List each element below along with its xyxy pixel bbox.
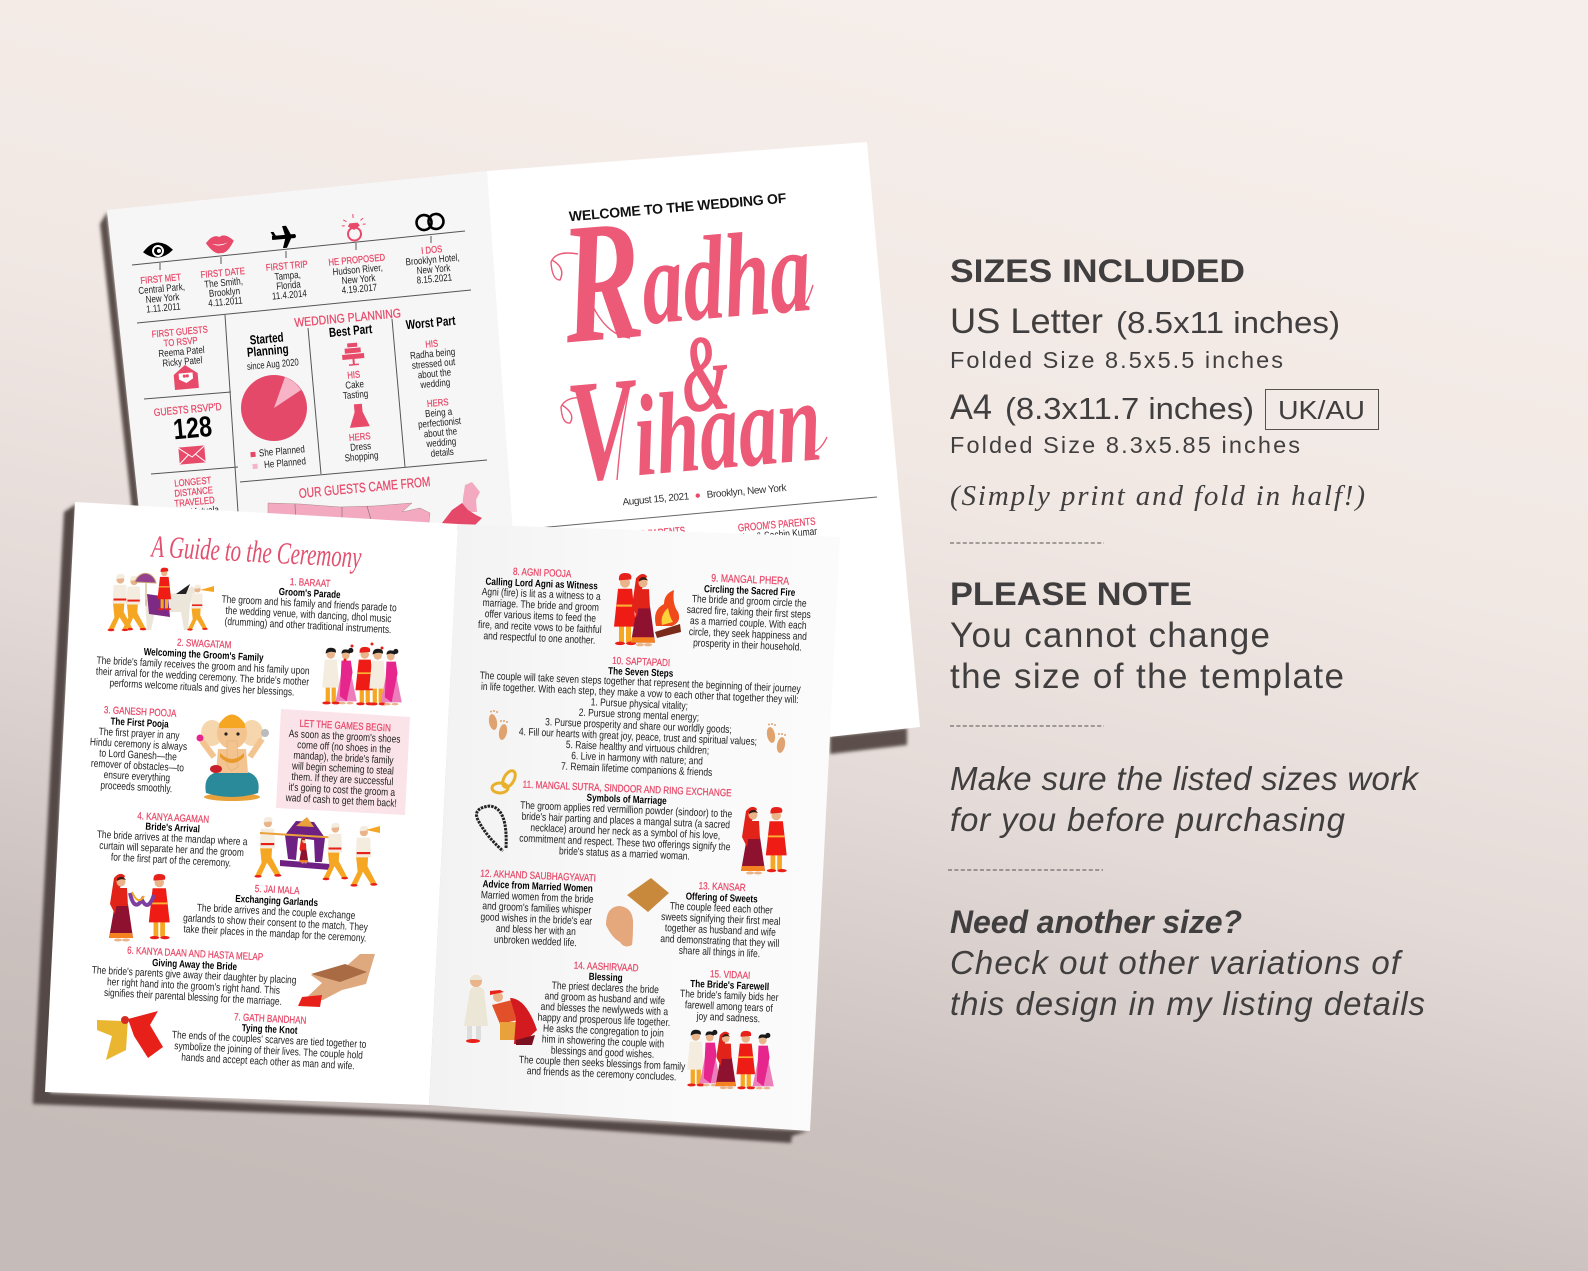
horse	[145, 584, 196, 630]
started planning: Started	[249, 331, 284, 348]
milestone: first date: Brooklyn	[208, 285, 240, 299]
step 2 swagatam: their arrival for the wedding ceremony. The bride's mother	[96, 666, 310, 689]
milestone: i dos: Brooklyn Hotel,	[405, 252, 460, 268]
his worst part: HIS	[425, 338, 439, 350]
step 11 mangal sutra: Symbols of Marriage	[586, 792, 667, 806]
icon: eye	[142, 241, 174, 259]
step 13 kansar: share all things in life.	[678, 945, 760, 960]
step 3 ganesh pooja: remover of obstacles—to	[91, 758, 184, 775]
icon: footprints right	[766, 723, 786, 754]
step 8 agni pooja: Agni (fire) is lit as a witness to a	[482, 586, 601, 603]
step 5 jai mala: 5. JAI MALA	[255, 883, 301, 896]
step 4 kanya agaman: Bride's Arrival	[145, 821, 200, 835]
another size note: Need another size?	[950, 904, 1242, 940]
step 2 swagatam: 2. SWAGATAM	[177, 637, 232, 651]
callout: let the games begin: will begin scheming to steal	[291, 760, 394, 778]
step 5 jai mala: Exchanging Garlands	[235, 893, 318, 908]
step 14 aashirvaad: and groom as husband and wife	[544, 990, 665, 1008]
step 1 baraat: 1. BARAAT	[290, 576, 331, 589]
his worst part: stressed out	[411, 356, 456, 371]
a4 folded size: Folded Size 8.3x5.85 inches	[950, 432, 1300, 458]
step 3 ganesh pooja: 3. GANESH POOJA	[104, 704, 177, 719]
icon: wedding rings	[416, 213, 444, 231]
step 12 akhand saubhagyavati: Married women from the bride	[481, 889, 594, 906]
step 8 agni pooja: marriage. The bride and groom	[482, 597, 599, 614]
step 14 aashirvaad: happy and prosperous life together.	[537, 1012, 670, 1029]
name: Radha: R	[554, 184, 649, 380]
his worst part: Radha being	[410, 346, 456, 361]
step 14 aashirvaad: and blesses the newlyweds with a	[540, 1001, 669, 1019]
step 9 mangal phera: Circling the Sacred Fire	[704, 583, 796, 598]
step 1 baraat: The groom and his family and friends parade to	[221, 594, 397, 615]
step 9 mangal phera: 9. MANGAL PHERA	[711, 573, 790, 588]
shadow: front sheet	[33, 504, 808, 1143]
milestone: first trip: 11.4.2014	[271, 288, 307, 302]
step 8 agni pooja: Calling Lord Agni as Witness	[485, 576, 598, 592]
a4 size: A4	[950, 388, 992, 427]
icon: diamond ring	[341, 213, 367, 241]
illustration: priest blessing couple	[464, 975, 537, 1045]
step 8 agni pooja: 8. AGNI POOJA	[513, 566, 572, 579]
step 15 vidaai: The Bride's Farewell	[690, 978, 769, 992]
milestone: i dos: I DOS	[421, 243, 443, 256]
step 11 mangal sutra: necklace) around her neck as a symbol of his love,	[530, 822, 720, 842]
step 5 jai mala: garlands to show their consent to the match. They	[183, 912, 368, 934]
milestone: first trip: Florida	[276, 279, 302, 292]
step 14 aashirvaad: 14. AASHIRVAAD	[573, 960, 639, 974]
step 6 kanya daan: her right hand into the groom's right hand. This	[107, 976, 280, 997]
hers worst part	[416, 395, 465, 460]
callout: let the games begin: wad of cash to get them back!	[285, 792, 397, 810]
step 11 mangal sutra: commitment and respect. These two offerings signify the	[519, 833, 731, 854]
step 14 aashirvaad: blessings and good wishes.	[551, 1045, 654, 1061]
step 6 kanya daan: Giving Away the Bride	[152, 957, 237, 972]
longest distance traveled: DISTANCE	[174, 484, 213, 499]
wedding planning heading: WEDDING PLANNING	[294, 306, 402, 330]
step 10 saptapadi: 10. SAPTAPADI	[612, 655, 670, 668]
step 5 jai mala: The bride arrives and the couple exchange	[196, 902, 356, 922]
name swashes	[551, 253, 827, 480]
callout: let the games begin: it's going to cost the groom a	[288, 782, 396, 799]
step 14 aashirvaad: He asks the congregation to join	[543, 1023, 664, 1040]
illustration: sindoor ceremony	[741, 807, 787, 874]
uk/au badge: UK/AU	[1278, 395, 1365, 425]
step 12 akhand saubhagyavati	[477, 868, 596, 950]
milestone: he proposed: New York	[341, 272, 376, 286]
step 13 kansar: and demonstrating that they will	[660, 933, 780, 950]
step 10 saptapadi: 5. Raise healthy and virtuous children;	[566, 739, 709, 757]
his worst part: wedding	[419, 377, 451, 390]
divider dashes	[948, 543, 1104, 870]
his best part: Tasting	[342, 388, 369, 401]
step 15 vidaai: joy and sadness.	[695, 1011, 760, 1026]
step 7 gath bandhan: Tying the Knot	[242, 1022, 298, 1036]
shadow: back sheet	[100, 212, 907, 754]
icon: footprints left	[488, 710, 508, 741]
step 15 vidaai: 15. VIDAAI	[710, 968, 750, 981]
worst part: Worst Part	[405, 315, 456, 333]
longest distance traveled: LONGEST	[174, 474, 212, 489]
step 15 vidaai	[679, 967, 780, 1026]
step 2 swagatam	[95, 633, 312, 700]
illustration: baraat procession	[108, 568, 214, 631]
guide title: A Guide to the Ceremony	[149, 528, 362, 574]
parents credits	[614, 515, 818, 545]
icon: gold rings	[492, 769, 518, 793]
step 3 ganesh pooja: proceeds smoothly.	[100, 780, 173, 796]
milestone: first met: FIRST MET	[140, 271, 182, 286]
milestone: first trip	[265, 258, 311, 302]
pie legend: He Planned	[264, 456, 306, 471]
step 13 kansar	[659, 879, 782, 961]
step 7 gath bandhan: The ends of the couples' scarves are tied together to	[172, 1029, 367, 1051]
step 10 saptapadi: 2. Pursue strong mental energy;	[578, 707, 699, 724]
illustration: Ganesh	[196, 714, 269, 801]
icon: dress	[348, 403, 370, 428]
milestone: first trip: FIRST TRIP	[265, 258, 308, 273]
step 11 mangal sutra: The groom applies red vermillion powder (sindoor) to the	[520, 800, 732, 821]
illustration: exchanging garlands	[109, 874, 170, 942]
parents credits: Lisa & Sachin Kumar	[738, 526, 818, 545]
longest distance traveled: TRAVELED	[174, 494, 215, 509]
illustration: tied scarves	[97, 1011, 163, 1060]
hers worst part: perfectionist	[418, 415, 462, 430]
guests rsvp'd count	[153, 401, 225, 448]
step 10 saptapadi: The couple will take seven steps together that represent the beginning of their journey	[480, 670, 801, 696]
purchase note	[950, 760, 1420, 838]
his worst part: about the	[417, 367, 452, 381]
another size note: this design in my listing details	[950, 985, 1425, 1022]
step 12 akhand saubhagyavati: unbroken wedded life.	[494, 934, 577, 949]
step 10 saptapadi: 3. Pursue prosperity and share our worldly goods;	[545, 716, 732, 736]
hers best part: HERS	[348, 430, 371, 443]
best part: Best Part	[329, 323, 373, 340]
cover divider	[538, 497, 877, 528]
front right page	[429, 524, 840, 1131]
milestone: first date	[200, 265, 248, 309]
step 6 kanya daan	[90, 943, 298, 1009]
hers worst part: wedding	[425, 436, 457, 449]
step 7 gath bandhan: symbolize the joining of their lives. The couple hold	[174, 1040, 363, 1062]
heading: please note: PLEASE NOTE	[950, 576, 1192, 612]
milestone: first met: 1.11.2011	[146, 301, 181, 315]
icon: cake	[341, 342, 365, 366]
date and location	[622, 483, 788, 508]
step 5 jai mala: take their places in the mandap for the ceremony.	[183, 923, 367, 945]
step 6 kanya daan: signifies their parental blessing for the marriage.	[104, 987, 282, 1008]
step 4 kanya agaman: The bride arrives at the mandap where a	[97, 829, 248, 849]
step 12 akhand saubhagyavati: 12. AKHAND SAUBHAGYAVATI	[480, 868, 596, 884]
step 15 vidaai: The bride's family bids her	[680, 988, 779, 1004]
step 7 gath bandhan: hands and accept each other as man and wife.	[181, 1052, 355, 1073]
us letter size: US Letter	[950, 302, 1103, 341]
his worst part	[409, 336, 458, 391]
panel: sizes and notes	[948, 253, 1425, 1022]
milestone: first trip: Tampa,	[274, 269, 301, 282]
name: Vihaan: Vihaan	[561, 332, 826, 513]
date and location: August 15, 2021	[622, 491, 690, 508]
icon: envelope	[178, 445, 206, 465]
step 1 baraat: Groom's Parade	[278, 586, 341, 600]
milestone: i dos: New York	[416, 262, 451, 276]
his best part	[341, 368, 369, 401]
step 10 saptapadi	[476, 649, 802, 783]
back sheet right page: cover	[487, 142, 920, 770]
step 1 baraat	[220, 573, 398, 637]
step 14 aashirvaad	[518, 958, 690, 1084]
step 15 vidaai: farewell among tears of	[685, 999, 773, 1015]
hers worst part: HERS	[426, 396, 449, 409]
his best part: HIS	[347, 369, 361, 381]
started planning	[244, 330, 299, 372]
step 13 kansar: together as husband and wife	[665, 922, 776, 939]
step 8 agni pooja: and respectful to one another.	[483, 630, 596, 647]
first guests to rsvp: Reema Patel	[158, 344, 205, 359]
icon: airplane	[270, 225, 297, 249]
step 14 aashirvaad: him in showering the couple with	[542, 1034, 664, 1051]
step 3 ganesh pooja: The first prayer in any	[98, 726, 180, 742]
first guests to rsvp	[151, 324, 211, 370]
step 14 aashirvaad: Blessing	[589, 971, 623, 983]
step 3 ganesh pooja	[87, 704, 189, 796]
milestone: first met	[137, 271, 187, 315]
icon: ear	[606, 906, 633, 946]
uk/au badge	[1266, 390, 1378, 430]
step 11 mangal sutra	[518, 779, 733, 865]
cover names	[554, 170, 826, 513]
step 4 kanya agaman: curtain will separate her and the groom	[99, 840, 244, 859]
milestone: first met: Central Park,	[138, 281, 185, 296]
step 3 ganesh pooja: to Lord Ganesh—the	[99, 748, 177, 764]
first guests to rsvp: Ricky Patel	[162, 354, 203, 369]
step 8 agni pooja: offer various items to feed the	[484, 608, 596, 625]
longest distance traveled: Kate Matuala	[171, 504, 220, 519]
panel: back sheet with infographic and cover	[107, 142, 920, 770]
milestone: he proposed: Hudson River,	[332, 262, 383, 277]
print note: (Simply print and fold in half!)	[950, 480, 1365, 512]
hers best part: Dress	[350, 440, 372, 453]
icon: open envelope with heart	[173, 364, 199, 390]
step 10 saptapadi: in life together. With each step, they make a vow to each other that together they will:	[481, 681, 799, 706]
started planning: Planning	[246, 343, 289, 360]
hers worst part: about the	[423, 426, 458, 440]
step 4 kanya agaman: 4. KANYA AGAMAN	[137, 810, 209, 825]
template size note: the size of the template	[950, 657, 1344, 696]
us letter size: (8.5x11 inches)	[1116, 305, 1340, 340]
us letter size	[950, 302, 1340, 341]
icon: lips	[205, 235, 235, 254]
guests rsvp'd count: 128	[172, 409, 213, 446]
pie legend	[250, 444, 306, 472]
step 12 akhand saubhagyavati: good wishes in the bride's ear	[480, 911, 593, 928]
step 4 kanya agaman: for the first part of the ceremony.	[111, 852, 231, 870]
milestone: first date: FIRST DATE	[200, 265, 245, 280]
step 13 kansar: sweets signifying their first meal	[661, 911, 781, 928]
his best part: Cake	[345, 378, 364, 391]
step 12 akhand saubhagyavati: and bless her with an	[496, 923, 576, 938]
parents credits: GROOM'S PARENTS	[737, 515, 816, 534]
milestone: first met: New York	[145, 291, 180, 305]
a4 size: (8.3x11.7 inches)	[1005, 391, 1254, 426]
started planning: since Aug 2020	[246, 356, 299, 372]
step 13 kansar: 13. KANSAR	[698, 880, 746, 893]
first guests to rsvp: TO RSVP	[163, 335, 198, 349]
another size note: Check out other variations of	[950, 944, 1404, 981]
template size note: You cannot change	[950, 616, 1270, 655]
milestone: first date: The Smith,	[204, 275, 243, 290]
illustration: joined hands	[298, 954, 375, 1007]
step 9 mangal phera: as a married couple. With each	[690, 615, 807, 632]
step 3 ganesh pooja: The First Pooja	[110, 716, 170, 730]
step 13 kansar: Offering of Sweets	[685, 891, 758, 905]
purchase note: Make sure the listed sizes work	[950, 760, 1420, 797]
illustration: couple at sacred fire	[614, 573, 681, 646]
dividers	[132, 231, 487, 512]
ampersand: &	[676, 312, 734, 437]
step 12 akhand saubhagyavati: and groom's families whisper	[482, 900, 592, 917]
step 2 swagatam: Welcoming the Groom's Family	[143, 646, 265, 663]
purchase note: for you before purchasing	[950, 801, 1346, 838]
step 9 mangal phera: circle, they seek happiness and	[689, 626, 807, 643]
step 3 ganesh pooja: Hindu ceremony is always	[90, 736, 188, 753]
step 8 agni pooja: fire, and recite vows to be faithful	[478, 619, 602, 636]
step 9 mangal phera: sacred fire, taking their first steps	[686, 604, 811, 621]
step 1 baraat: the wedding venue, with dancing, dhol music	[225, 605, 392, 625]
step 14 aashirvaad: The priest declares the bride	[551, 980, 659, 997]
milestone: i dos	[404, 242, 462, 287]
step 2 swagatam: performs welcome rituals and gives her blessings.	[109, 677, 295, 699]
pie legend: She Planned	[259, 444, 305, 459]
heading: sizes included: SIZES INCLUDED	[950, 253, 1245, 289]
guests rsvp'd count: GUESTS RSVP'D	[153, 401, 222, 419]
icon: sweet	[627, 878, 669, 912]
date and location: Brooklyn, New York	[706, 483, 788, 501]
guests came from heading: OUR GUESTS CAME FROM	[298, 474, 431, 501]
step 10 saptapadi: 7. Remain lifetime companions & friends	[561, 761, 713, 779]
parents credits: BRIDE'S PARENTS	[614, 524, 686, 542]
step 5 jai mala	[182, 879, 370, 945]
step 10 saptapadi: 4. Fill our hearts with great joy, peace, trust and spiritual values;	[519, 726, 757, 748]
step 6 kanya daan: 6. KANYA DAAN AND HASTA MELAP	[127, 945, 263, 963]
pie chart: she planned vs he planned	[241, 375, 307, 441]
callout: let the games begin: mandap), the bride's family	[293, 750, 394, 767]
callout: let the games begin: come off (no shoes in the	[297, 739, 391, 756]
step 1 baraat: (drumming) and other traditional instruments.	[224, 616, 392, 636]
step 2 swagatam: The bride's family receives the groom and his family upon	[96, 655, 310, 678]
step 9 mangal phera: prosperity in their household.	[693, 637, 802, 654]
step 11 mangal sutra: bride's status as a married woman.	[559, 845, 690, 863]
back sheet left page	[107, 171, 530, 540]
front left page	[45, 502, 458, 1105]
callout: let the games begin: LET THE GAMES BEGIN	[299, 718, 391, 734]
step 9 mangal phera	[685, 572, 813, 654]
step 14 aashirvaad: and friends as the ceremony concludes.	[527, 1065, 677, 1084]
step 10 saptapadi: 1. Pursue physical vitality;	[590, 696, 688, 713]
callout: let the games begin: them. If they are successful	[291, 771, 394, 789]
another size note	[950, 904, 1425, 1022]
us folded size: Folded Size 8.5x5.5 inches	[950, 347, 1283, 373]
milestone: he proposed: HE PROPOSED	[328, 252, 385, 268]
step 7 gath bandhan: 7. GATH BANDHAN	[234, 1011, 307, 1026]
step 11 mangal sutra: bride's hair parting and places a mangal sutra (a sacred	[521, 811, 730, 832]
template size note	[950, 616, 1344, 696]
callout: let the games begin: As soon as the groom's shoes	[288, 728, 401, 746]
illustration: welcoming family	[322, 642, 402, 705]
milestone: he proposed: 4.19.2017	[341, 282, 378, 296]
a4 size	[950, 388, 1254, 427]
name: Radha: adha	[636, 203, 816, 350]
step 11 mangal sutra: 11. MANGAL SUTRA, SINDOOR AND RING EXCHANGE	[522, 779, 732, 799]
icon: mangal sutra necklace	[476, 806, 506, 851]
step 10 saptapadi: The Seven Steps	[608, 665, 673, 679]
step 12 akhand saubhagyavati: Advice from Married Women	[482, 878, 593, 894]
map of guest origins	[268, 482, 482, 530]
milestone: he proposed	[328, 252, 388, 297]
callout: let the games begin	[276, 709, 410, 815]
step 6 kanya daan: The bride's parents give away their daughter by placing	[91, 964, 297, 987]
step 8 agni pooja	[477, 565, 604, 647]
milestone: first date: 4.11.2011	[208, 295, 243, 309]
hers best part	[342, 430, 379, 464]
milestone: i dos: 8.15.2021	[416, 272, 453, 286]
illustration: farewell family	[687, 1030, 774, 1089]
cover heading: WELCOME TO THE WEDDING OF	[568, 190, 787, 224]
illustration: palanquin	[254, 817, 380, 887]
step 14 aashirvaad: The couple then seeks blessings from family	[519, 1054, 686, 1073]
step 4 kanya agaman	[95, 808, 249, 871]
first guests to rsvp: FIRST GUESTS	[151, 324, 208, 340]
longest distance traveled	[169, 474, 220, 519]
step 9 mangal phera: The bride and groom circle the	[692, 593, 807, 610]
hers worst part: details	[430, 446, 455, 459]
timeline icons	[142, 213, 444, 259]
step 3 ganesh pooja: ensure everything	[103, 769, 170, 785]
step 13 kansar: The couple feed each other	[669, 900, 774, 917]
step 7 gath bandhan	[170, 1008, 368, 1073]
panel: front sheet ceremony guide	[45, 502, 840, 1131]
step 10 saptapadi: 6. Live in harmony with nature; and	[571, 750, 703, 768]
hers best part: Shopping	[344, 450, 379, 464]
hers worst part: Being a	[425, 406, 453, 419]
